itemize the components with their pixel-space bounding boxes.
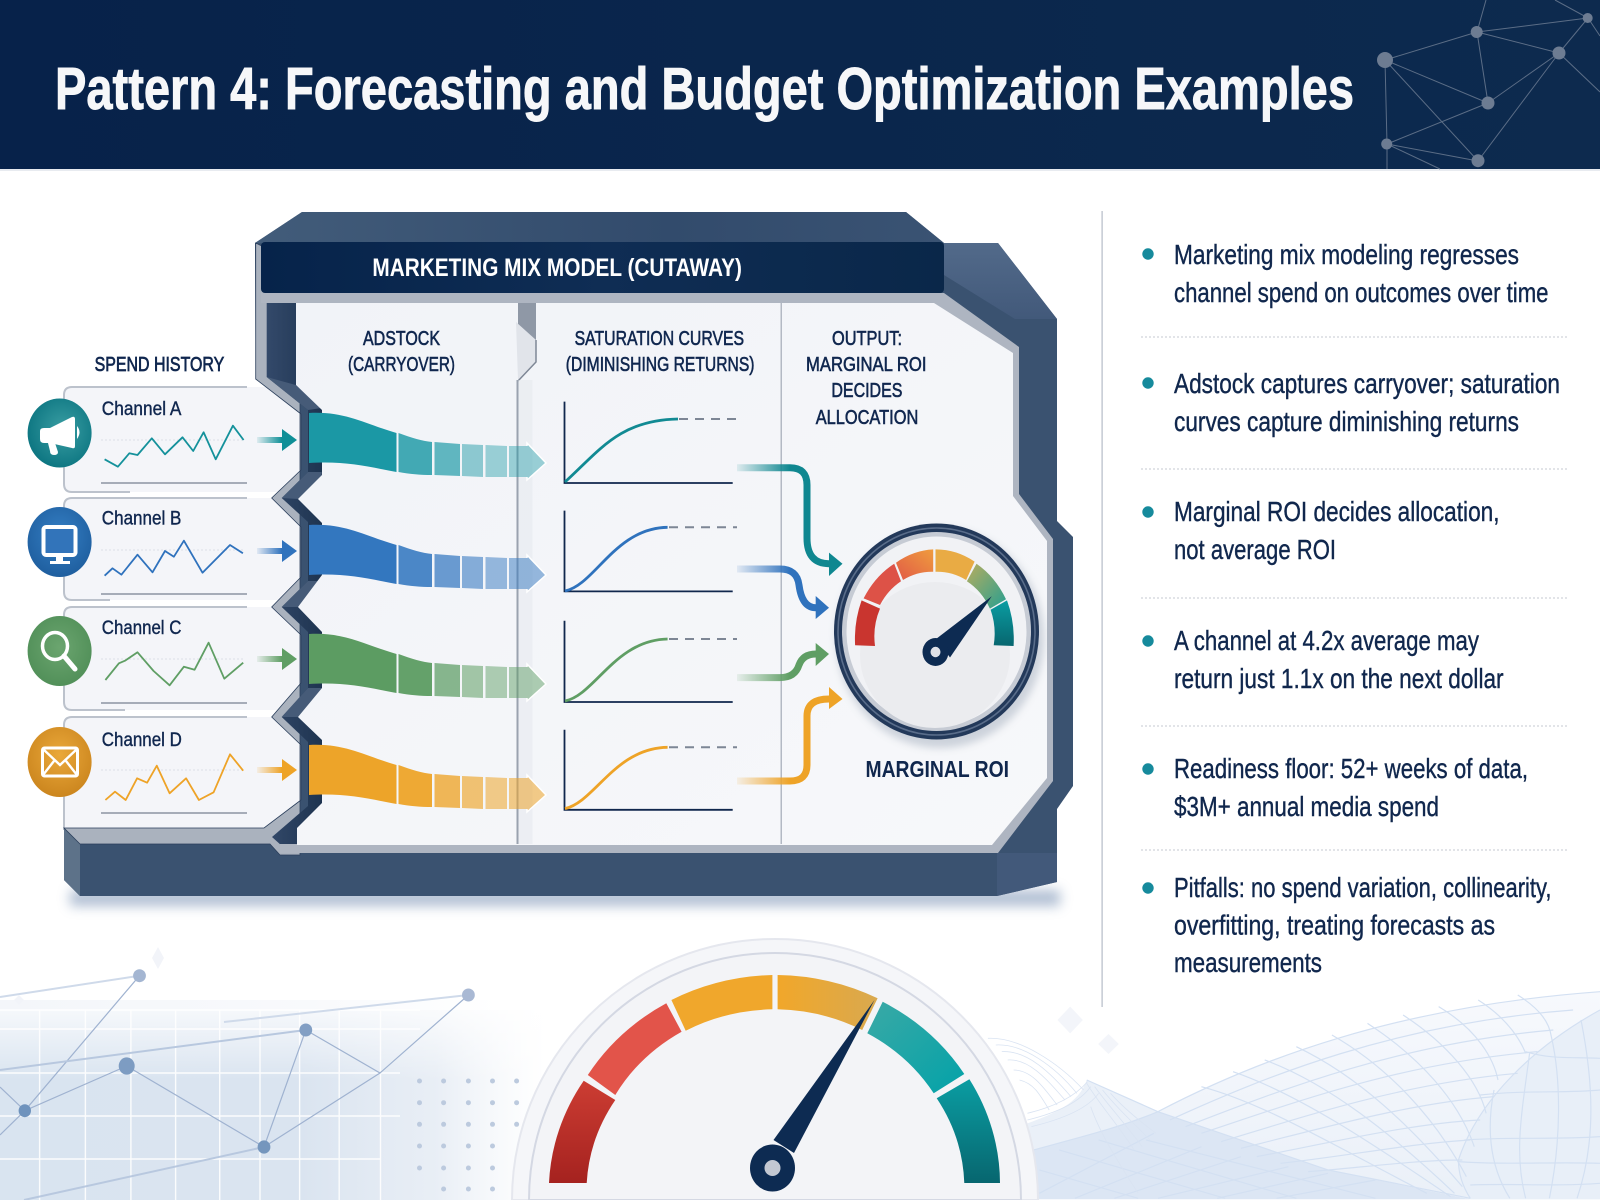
bullet 2	[1142, 368, 1560, 437]
bullet 6: measurements	[1174, 947, 1322, 978]
column dividers	[516, 303, 782, 844]
icon: megaphone	[28, 398, 92, 468]
label: channel A: Channel A	[102, 398, 181, 420]
header plate: MARKETING MIX MODEL (CUTAWAY)	[372, 254, 742, 282]
dial needle	[922, 596, 992, 666]
base right facet	[997, 853, 1057, 896]
curve chart D	[564, 730, 737, 810]
heading: spend history: SPEND HISTORY	[95, 354, 224, 376]
flow: channel B	[309, 525, 546, 592]
bullet 4: A channel at 4.2x average may	[1174, 625, 1479, 656]
flow: channel D	[309, 745, 546, 812]
adstock flow bands	[309, 413, 546, 812]
bullet 5	[1142, 753, 1528, 822]
bullet 3: not average ROI	[1174, 534, 1336, 565]
base shadow	[70, 890, 1060, 906]
arrow: channel C to gauge	[737, 643, 829, 678]
bullet 6	[1142, 872, 1552, 978]
vertical divider	[1102, 211, 1103, 1007]
base left bevel	[64, 828, 80, 896]
column heading: adstock	[348, 328, 455, 376]
label: channel B: Channel B	[102, 508, 181, 530]
lighter slate facets on zigzag	[267, 377, 322, 717]
column heading: adstock: (CARRYOVER)	[348, 354, 455, 376]
dark inner facet	[267, 301, 322, 846]
bevel strip: panel edge	[261, 293, 1053, 853]
card: channel A	[28, 387, 320, 492]
flow: channel C	[309, 634, 546, 701]
icon: monitor	[28, 507, 92, 577]
column heading: saturation curves: (DIMINISHING RETURNS)	[566, 354, 754, 376]
arrow: channel D to gauge	[737, 687, 842, 781]
bevel strip: left	[64, 243, 301, 855]
bullet 3	[1142, 496, 1500, 565]
top facet	[255, 212, 944, 243]
bullet 3: Marginal ROI decides allocation,	[1174, 496, 1500, 527]
column heading: output	[806, 328, 926, 429]
gauge needle	[750, 1000, 874, 1192]
gauge band segments	[549, 975, 1000, 1183]
column notch	[516, 303, 536, 381]
column heading: output: ALLOCATION	[816, 407, 918, 429]
arrow: channel A to gauge	[737, 468, 842, 576]
big gauge at bottom	[512, 939, 1038, 1200]
header plate	[261, 242, 944, 293]
label: marginal ROI: MARGINAL ROI	[866, 756, 1009, 782]
icon: magnifier	[28, 616, 92, 686]
label: channel C: Channel C	[102, 617, 181, 639]
background decoration: wave mesh bottom-right	[988, 992, 1600, 1199]
column heading: saturation curves: SATURATION CURVES	[575, 328, 744, 350]
inner panel	[296, 303, 1047, 845]
bullet 1	[1142, 239, 1548, 308]
saturation curve charts	[564, 402, 737, 810]
column heading: output: MARGINAL ROI	[806, 354, 926, 376]
sparkline B	[105, 541, 243, 576]
icon: envelope	[28, 727, 92, 797]
frame body	[64, 212, 1073, 896]
bullet 4: return just 1.1x on the next dollar	[1174, 663, 1504, 694]
label: channel D: Channel D	[102, 729, 182, 751]
card: channel D	[28, 717, 320, 830]
sparkline D	[105, 754, 243, 800]
decoration: network nodes	[1377, 0, 1600, 169]
column heading: adstock: ADSTOCK	[363, 328, 441, 350]
column heading: output: DECIDES	[831, 380, 902, 402]
card: channel C	[28, 607, 320, 710]
bullet 5: $3M+ annual media spend	[1174, 791, 1439, 822]
curve chart B	[564, 511, 737, 591]
dial band segments	[855, 549, 1014, 646]
column heading: output: OUTPUT:	[832, 328, 902, 350]
small input arrows	[257, 429, 297, 781]
right upper facet	[944, 243, 1057, 319]
sparkline C	[105, 643, 243, 685]
bullet 2: curves capture diminishing returns	[1174, 406, 1519, 437]
column heading: saturation curves	[566, 328, 754, 376]
machine frame: marketing mix model cutaway	[64, 212, 1073, 906]
background decoration: network chart bottom-left	[0, 947, 545, 1200]
bullet 6: overfitting, treating forecasts as	[1174, 910, 1495, 940]
key takeaways list	[1141, 239, 1568, 978]
card: channel B	[28, 498, 320, 600]
header banner	[0, 0, 1600, 171]
sparkline A	[105, 426, 244, 467]
bullet 1: Marketing mix modeling regresses	[1174, 239, 1519, 270]
spend history cards	[28, 387, 320, 830]
bullet 4	[1142, 625, 1504, 694]
arrow: channel B to gauge	[737, 569, 829, 619]
flow: channel A	[309, 413, 546, 480]
curve chart C	[564, 621, 737, 702]
curve chart A	[564, 402, 737, 483]
marginal ROI dial gauge	[834, 524, 1044, 748]
elbow arrows into gauge	[737, 468, 842, 781]
